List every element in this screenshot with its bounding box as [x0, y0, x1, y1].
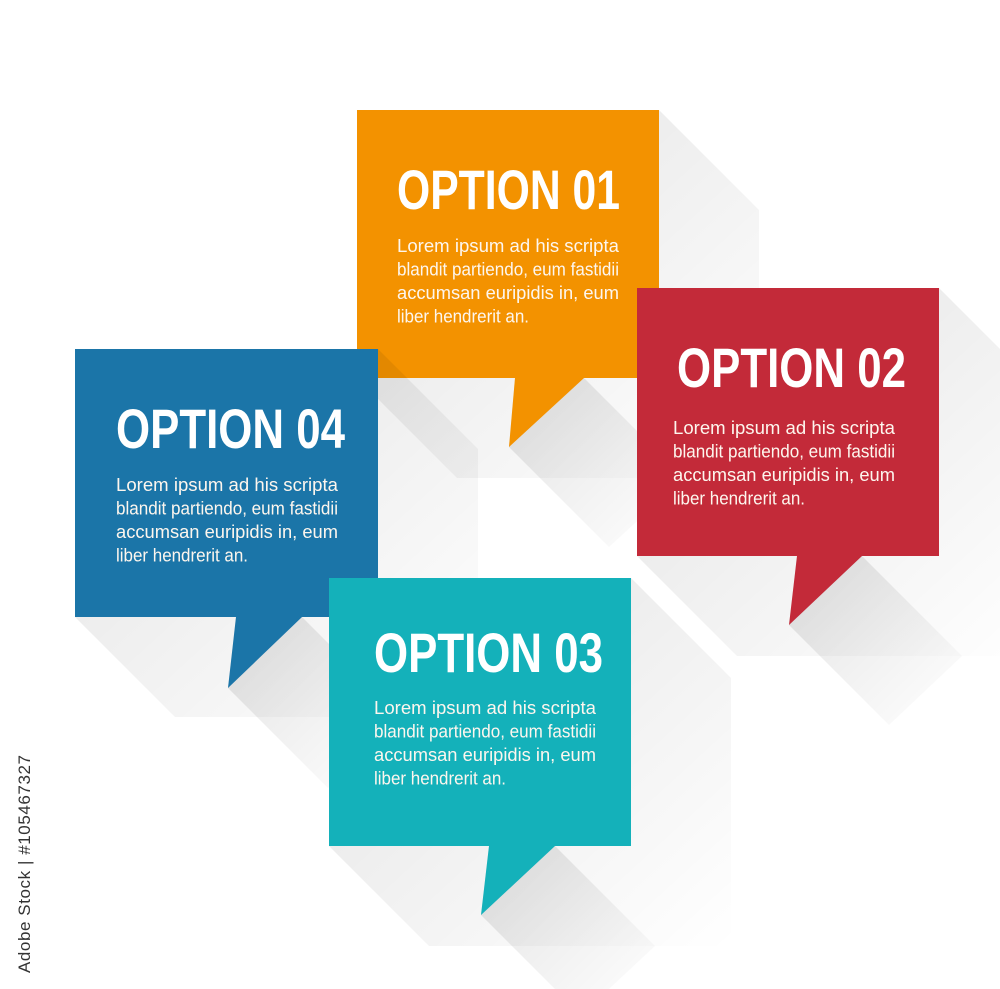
watermark text: Adobe Stock | #105467327 [15, 755, 34, 973]
panel: option 02: Lorem ipsum ad his scripta [673, 418, 896, 438]
panel: option 03 [329, 578, 731, 989]
panel: option 02: accumsan euripidis in, eum [673, 465, 895, 485]
panel: option 04: Lorem ipsum ad his scripta [116, 475, 339, 495]
panel: option 01: accumsan euripidis in, eum [397, 283, 619, 303]
panel: option 04: blandit partiendo, eum fastidii [116, 498, 338, 518]
panel: option 01: liber hendrerit an. [397, 306, 529, 326]
panel: option 01: blandit partiendo, eum fastidii [397, 260, 619, 280]
panel: option 01 [357, 110, 759, 547]
panel: option 02 [637, 288, 1000, 725]
panel: option 02: liber hendrerit an. [673, 488, 805, 508]
panel: option 03: liber hendrerit an. [374, 768, 506, 788]
panel: option 04: accumsan euripidis in, eum [116, 522, 338, 542]
panel: option 03: blandit partiendo, eum fastidii [374, 722, 596, 742]
panel: option 03: OPTION 03 [374, 621, 603, 684]
panel: option 04: liber hendrerit an. [116, 546, 248, 566]
panel: option 02: OPTION 02 [677, 336, 906, 399]
panel: option 04: OPTION 04 [116, 397, 345, 460]
panel: option 02: blandit partiendo, eum fastidii [673, 442, 895, 462]
panel: option 01: Lorem ipsum ad his scripta [397, 236, 620, 256]
panel: option 04 [75, 349, 478, 788]
panel: option 03: accumsan euripidis in, eum [374, 745, 596, 765]
panel: option 01: OPTION 01 [397, 158, 620, 221]
panel: option 03: Lorem ipsum ad his scripta [374, 698, 597, 718]
